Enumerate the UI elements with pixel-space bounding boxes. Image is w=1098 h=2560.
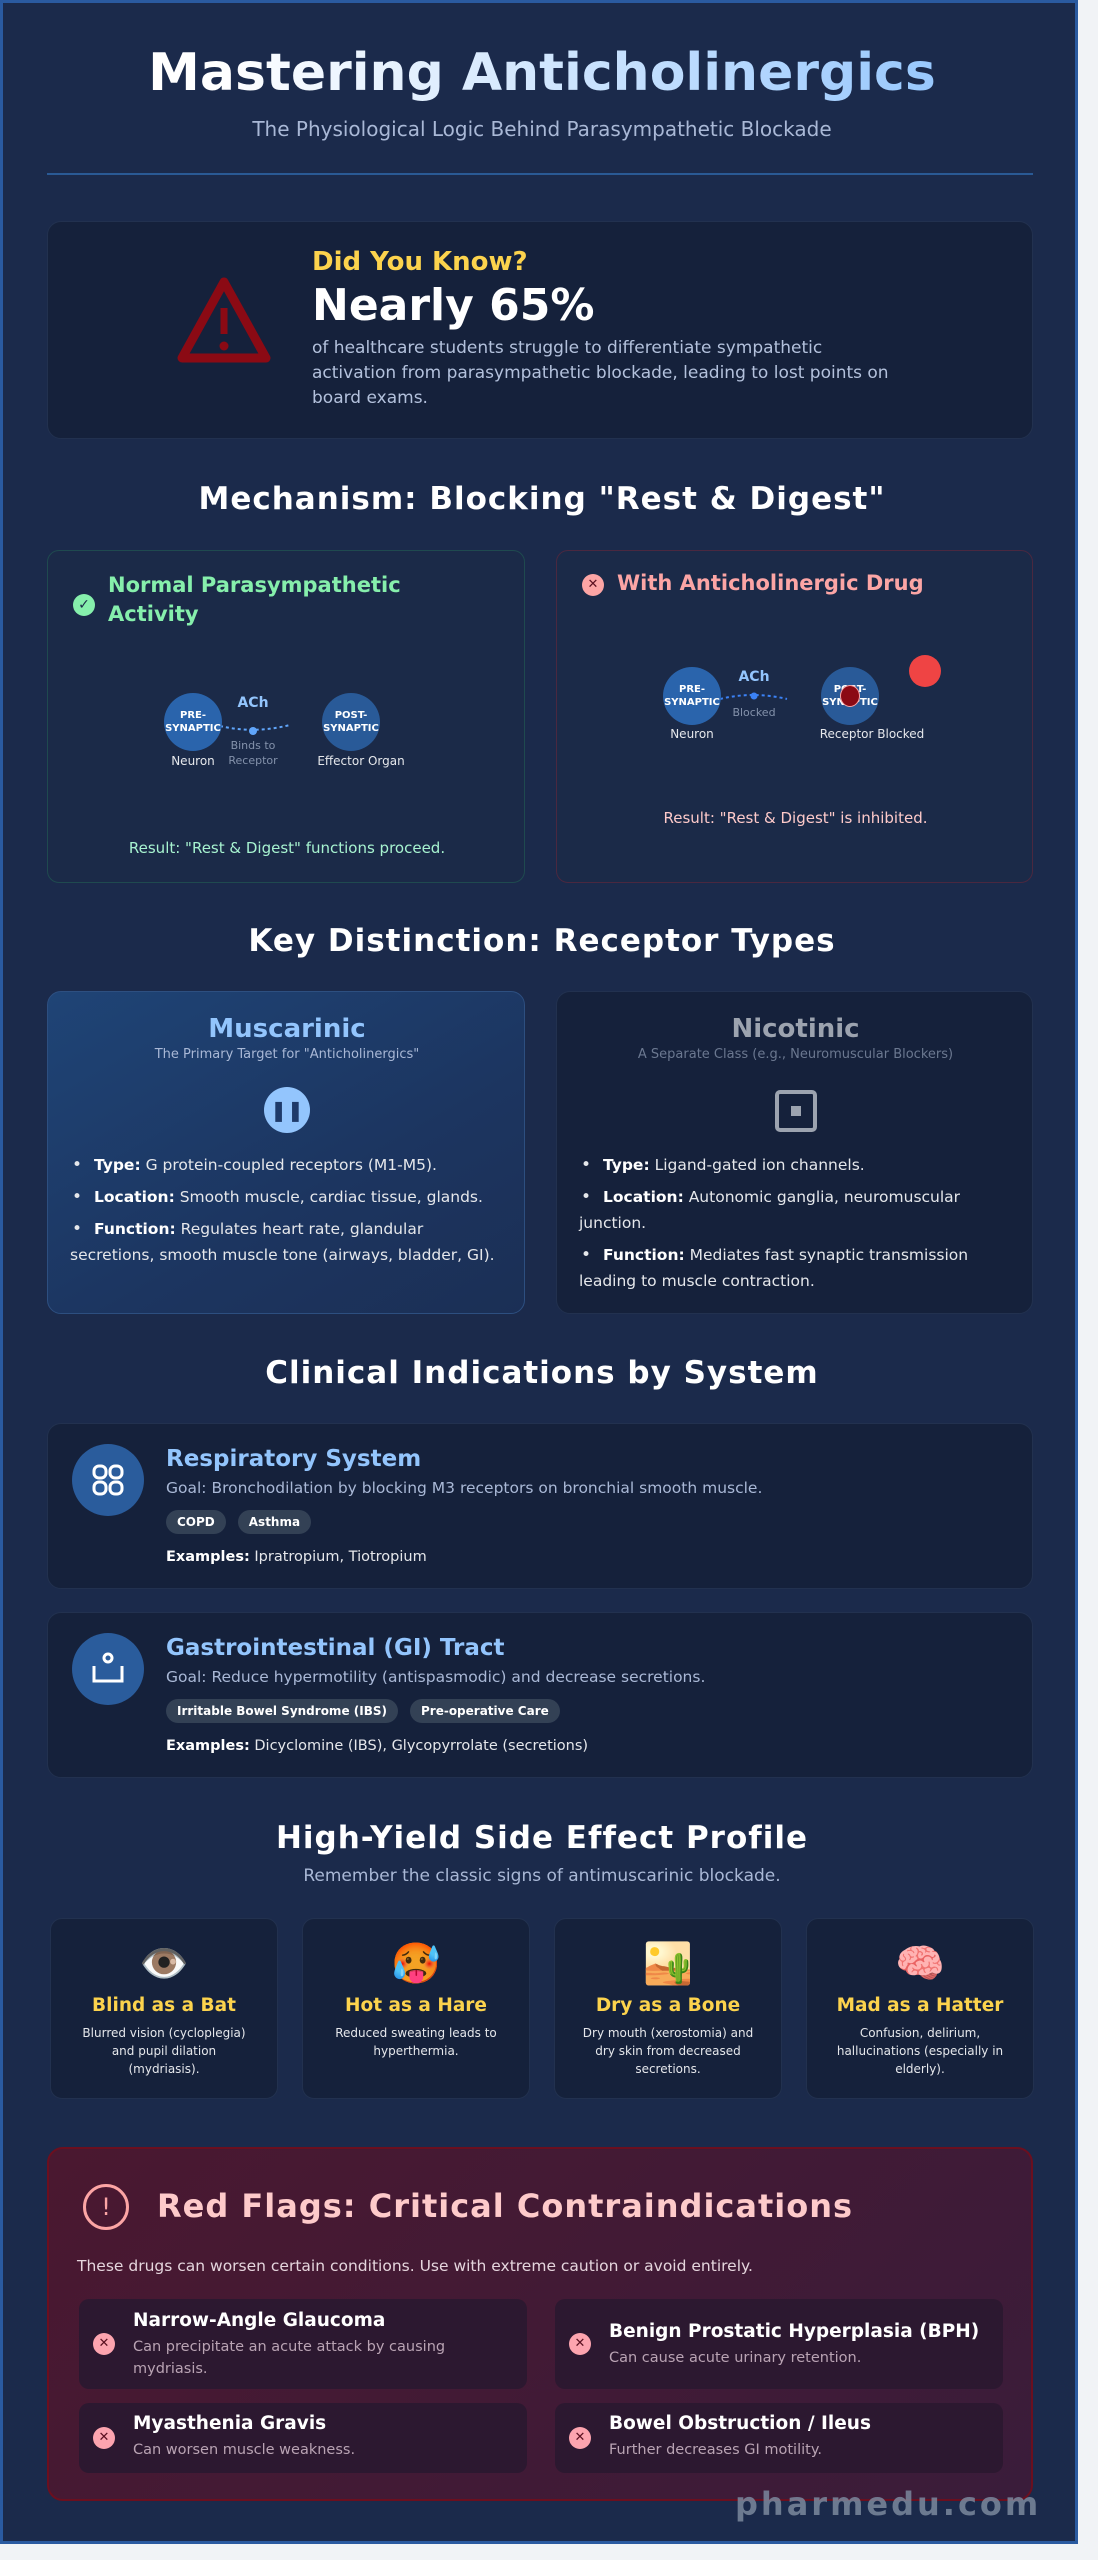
card: blind as a bat: Blind as a Bat xyxy=(92,1995,236,2016)
title: Respiratory System xyxy=(166,1446,421,1472)
card: hot as a hare: Reduced sweating leads to hyperthermia. xyxy=(335,2026,497,2058)
icon: alert circle xyxy=(83,2184,129,2230)
panel: red flags xyxy=(47,2147,1033,2501)
card: mad as a hatter xyxy=(806,1918,1034,2099)
icon: x xyxy=(582,574,604,596)
diagram: blocked: Blocked xyxy=(732,706,776,719)
panel: muscarinic xyxy=(47,991,525,1314)
diagram: normal binding: Effector Organ xyxy=(317,754,405,768)
card: dry as a bone: Dry as a Bone xyxy=(596,1995,740,2016)
panel: GI xyxy=(47,1612,1033,1778)
bullets: Location: Autonomic ganglia, neuromuscular junction. xyxy=(579,1188,960,1232)
heading: receptor types: Key Distinction: Receptor Types xyxy=(248,923,836,959)
panel: anticholinergic xyxy=(556,550,1033,883)
card: mad as a hatter: Confusion, delirium, hallucinations (especially in elderly). xyxy=(837,2026,1003,2076)
heading: mechanism: Mechanism: Blocking "Rest & Digest" xyxy=(198,481,886,517)
icon: check xyxy=(73,594,95,616)
panel: nicotinic xyxy=(556,991,1033,1314)
card: blind as a bat xyxy=(50,1918,278,2099)
item: glaucoma: Can precipitate an acute attack by causing mydriasis. xyxy=(133,2339,445,2377)
title: Gastrointestinal (GI) Tract xyxy=(166,1635,505,1661)
bullets: Type: Ligand-gated ion channels. xyxy=(603,1156,865,1174)
panel: normal activity xyxy=(47,550,525,883)
item: myasthenia: Can worsen muscle weakness. xyxy=(133,2442,355,2458)
card: dry as a bone: Dry mouth (xerostomia) and dry skin from decreased secretions. xyxy=(583,2026,753,2076)
card: mad as a hatter: Mad as a Hatter xyxy=(837,1995,1003,2016)
icon: muscarinic: ❚❚ xyxy=(270,1098,304,1122)
diagram: blocked: PRE- xyxy=(679,684,705,695)
card: hot as a hare: 🥵 xyxy=(391,1940,441,1987)
heading: Nicotinic xyxy=(731,1014,860,1044)
diagram: blocked: POST- xyxy=(834,684,866,695)
heading: side effects: High-Yield Side Effect Profile xyxy=(276,1820,808,1856)
card: dry as a bone: 🏜️ xyxy=(643,1940,693,1987)
diagram: normal binding: PRE- xyxy=(180,710,206,721)
item: glaucoma xyxy=(79,2299,527,2389)
item: BPH: Can cause acute urinary retention. xyxy=(609,2350,861,2366)
bullets: Type: G protein-coupled receptors (M1-M5). xyxy=(94,1156,437,1174)
card: hot as a hare: Hot as a Hare xyxy=(345,1995,487,2016)
diagram: normal binding: SYNAPTIC xyxy=(165,723,221,734)
item: bowel obstruction: Further decreases GI motility. xyxy=(609,2442,822,2458)
icon: check: ✓ xyxy=(78,597,90,613)
watermark: pharmedu.com xyxy=(735,2485,1041,2523)
panel: muscarinic: The Primary Target for "Anticholinergics" xyxy=(155,1047,419,1062)
card: hot as a hare xyxy=(302,1918,530,2099)
result text: Result: "Rest & Digest" is inhibited. xyxy=(664,809,928,827)
diagram: blocked: SYNAPTIC xyxy=(664,697,720,708)
heading: did you know: Did You Know? xyxy=(312,247,528,277)
diagram: normal binding xyxy=(164,693,405,768)
bullets xyxy=(70,1156,495,1264)
tags xyxy=(166,1510,311,1534)
item: myasthenia: ✕ xyxy=(99,2430,109,2445)
item: glaucoma: ✕ xyxy=(99,2336,109,2351)
diagram: normal binding: SYNAPTIC xyxy=(323,723,379,734)
result text: Result: "Rest & Digest" functions proceed. xyxy=(129,839,445,857)
diagram: blocked xyxy=(663,655,941,741)
icon: x: ✕ xyxy=(588,577,598,592)
icon: drug molecule blocking xyxy=(840,685,860,707)
panel: respiratory xyxy=(47,1423,1033,1589)
diagram: blocked: ACh xyxy=(738,669,770,685)
stat: Nearly 65% xyxy=(312,280,594,331)
panel: nicotinic: A Separate Class (e.g., Neuromuscular Blockers) xyxy=(638,1047,953,1062)
text block: These drugs can worsen certain conditions. Use with extreme caution or avoid entirely. xyxy=(77,2257,753,2275)
diagram: blocked: Neuron xyxy=(670,727,714,741)
panel heading: Normal Parasympathetic Activity xyxy=(108,573,401,626)
item: myasthenia xyxy=(79,2403,527,2473)
text block: of healthcare students struggle to differentiate sympathetic activation from parasympathetic blockade, leading to lost points on board exams. xyxy=(312,338,889,408)
diagram: blocked: Receptor Blocked xyxy=(820,727,924,741)
card: blind as a bat: Blurred vision (cycloplegia) and pupil dilation (mydriasis). xyxy=(82,2026,246,2076)
bullets xyxy=(578,1156,968,1290)
text: Remember the classic signs of antimuscarinic blockade. xyxy=(303,1866,781,1886)
panel: GI: Goal: Reduce hypermotility (antispasmodic) and decrease secretions. xyxy=(166,1668,705,1686)
diagram: normal binding: Binds to xyxy=(231,739,275,752)
bullets: Function: Mediates fast synaptic transmission leading to muscle contraction. xyxy=(579,1246,968,1290)
item: bowel obstruction xyxy=(555,2403,1003,2473)
icon: alert circle: ! xyxy=(101,2193,111,2221)
heading: clinical indications: Clinical Indications by System xyxy=(265,1355,819,1391)
item: bowel obstruction: ✕ xyxy=(575,2430,585,2445)
tags xyxy=(166,1699,560,1723)
tags: Asthma xyxy=(249,1515,300,1529)
icon: warning triangle xyxy=(178,278,270,362)
diagram: normal binding: Receptor xyxy=(228,754,278,767)
card: blind as a bat: 👁️ xyxy=(139,1940,189,1987)
title: Mastering Anticholinergics xyxy=(148,43,936,103)
item: myasthenia: Myasthenia Gravis xyxy=(133,2413,326,2434)
panel: respiratory: Goal: Bronchodilation by blocking M3 receptors on bronchial smooth muscle. xyxy=(166,1479,762,1497)
tags: COPD xyxy=(177,1515,215,1529)
item: BPH: ✕ xyxy=(575,2336,585,2351)
icon: stomach xyxy=(72,1633,144,1705)
tags: Irritable Bowel Syndrome (IBS) xyxy=(177,1704,387,1718)
item: BPH: Benign Prostatic Hyperplasia (BPH) xyxy=(609,2321,979,2342)
panel: respiratory: Examples: Ipratropium, Tiotropium xyxy=(166,1549,427,1565)
item: bowel obstruction: Bowel Obstruction / Ileus xyxy=(609,2413,871,2434)
heading: Red Flags: Critical Contraindications xyxy=(157,2187,853,2225)
diagram: normal binding: ACh xyxy=(237,695,269,711)
card: dry as a bone xyxy=(554,1918,782,2099)
subtitle: The Physiological Logic Behind Parasympathetic Blockade xyxy=(252,117,832,141)
icon: drug molecule xyxy=(909,655,941,687)
panel heading: With Anticholinergic Drug xyxy=(617,571,924,595)
panel: GI: Examples: Dicyclomine (IBS), Glycopyrrolate (secretions) xyxy=(166,1738,588,1754)
item: glaucoma: Narrow-Angle Glaucoma xyxy=(133,2310,385,2331)
heading: Muscarinic xyxy=(208,1014,366,1044)
icon: muscarinic xyxy=(264,1087,310,1133)
diagram: normal binding: Neuron xyxy=(171,754,215,768)
callout: did you know xyxy=(47,221,1033,439)
bullets: Location: Smooth muscle, cardiac tissue, glands. xyxy=(94,1188,483,1206)
icon: nicotinic xyxy=(775,1090,817,1132)
tags: Pre-operative Care xyxy=(421,1704,549,1718)
card: mad as a hatter: 🧠 xyxy=(895,1940,945,1987)
icon: lungs xyxy=(72,1444,144,1516)
item: BPH xyxy=(555,2299,1003,2389)
diagram: blocked: SYNAPTIC xyxy=(822,697,878,708)
bullets: Function: Regulates heart rate, glandular secretions, smooth muscle tone (airways, bladder, GI). xyxy=(70,1220,495,1264)
diagram: normal binding: POST- xyxy=(335,710,367,721)
